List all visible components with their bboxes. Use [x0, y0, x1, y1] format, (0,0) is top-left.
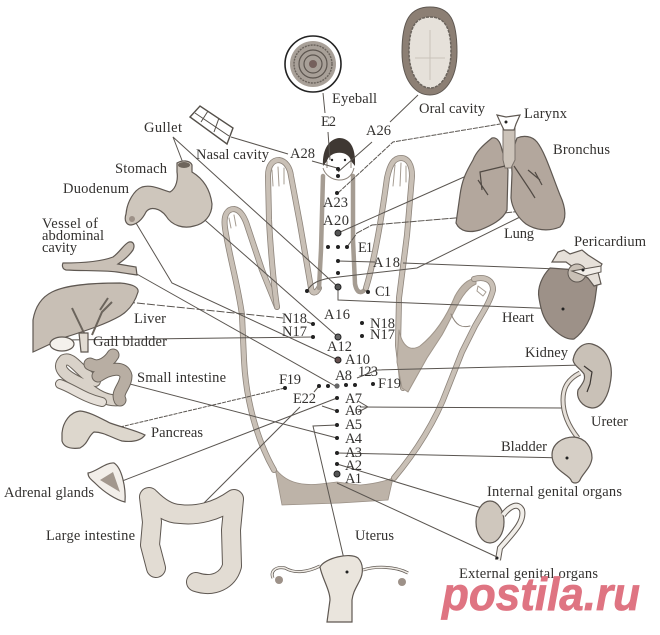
ureter	[563, 373, 580, 438]
thumb outer edge and right palm edge	[394, 278, 493, 478]
organ labels: Nasal cavity	[196, 147, 270, 163]
organ labels: Bronchus	[553, 142, 610, 158]
right lung	[511, 136, 565, 230]
organ labels: Larynx	[524, 106, 568, 122]
organ labels: Oral cavity	[419, 101, 486, 117]
organ labels: Pericardium	[574, 234, 647, 250]
organ labels: Eyeball	[332, 91, 377, 107]
organ labels: Pancreas	[151, 425, 203, 441]
icon: oral cavity	[402, 7, 457, 95]
organ labels: Duodenum	[63, 181, 130, 197]
point labels: A20	[323, 213, 349, 229]
hand outline	[225, 158, 493, 505]
organ labels: Liver	[134, 311, 166, 327]
icon: kidney and ureter	[563, 344, 611, 438]
point labels: N18	[370, 316, 395, 332]
organ labels: Stomach	[115, 161, 168, 177]
point labels: A5	[345, 417, 362, 433]
icon: pancreas	[62, 411, 145, 448]
organ labels: Ureter	[591, 414, 628, 430]
point labels: A12	[327, 339, 352, 355]
organ labels: Vessel of	[42, 216, 98, 232]
organ labels: Lung	[504, 226, 534, 242]
point labels: A16	[324, 307, 350, 323]
icon: uterus	[272, 556, 408, 622]
organ labels: Kidney	[525, 345, 569, 361]
point labels: E2	[321, 114, 336, 130]
organ labels: Uterus	[355, 528, 394, 544]
icon: internal and external genital organs	[476, 501, 522, 560]
bronchial branches	[478, 166, 542, 198]
acupoint dots	[283, 167, 375, 477]
watermark: postila.ru	[440, 568, 640, 620]
point labels: A1	[345, 471, 362, 487]
point labels: F19	[378, 376, 401, 392]
icon: large intestine	[149, 497, 234, 584]
finger nails	[229, 163, 486, 296]
point labels: A28	[290, 146, 315, 162]
point labels	[279, 114, 401, 487]
icon: larynx and bronchus lungs	[456, 115, 565, 232]
point labels: A26	[366, 123, 391, 139]
icon: small intestine	[60, 355, 126, 402]
point labels: F19	[279, 372, 301, 388]
face on middle finger	[323, 138, 355, 180]
point labels: N17	[370, 327, 395, 343]
trachea	[503, 128, 515, 168]
ring finger	[268, 160, 319, 307]
organ labels: Small intestine	[137, 370, 226, 386]
point labels: 123	[358, 364, 378, 380]
left palm edge and little finger	[225, 209, 277, 470]
icon: heart and pericardium	[539, 250, 602, 339]
organ labels: External genital organs	[459, 566, 598, 582]
organ labels: Internal genital organs	[487, 484, 622, 500]
point labels: A23	[323, 195, 348, 211]
hair	[323, 138, 355, 166]
point labels: N18	[282, 311, 307, 327]
organ labels: abdominal	[42, 228, 104, 244]
icon: eyeball	[285, 36, 341, 92]
organ labels	[4, 91, 647, 582]
point labels: A10	[345, 352, 370, 368]
hand base shading	[275, 468, 393, 505]
point labels: A3	[345, 445, 362, 461]
point labels: A7	[345, 391, 362, 407]
icon: abdominal vessel	[62, 242, 137, 275]
eyes and jaw	[323, 161, 354, 180]
index finger	[366, 158, 412, 388]
organ labels: Gullet	[144, 120, 182, 136]
point labels: A6	[345, 403, 362, 419]
point labels: A8	[335, 368, 352, 384]
point labels: E1	[358, 240, 373, 256]
icon: nasal cavity	[190, 106, 233, 144]
point labels: C1	[375, 284, 391, 300]
larynx	[497, 115, 520, 130]
point labels: A18	[373, 255, 400, 271]
organ labels: Heart	[502, 310, 534, 326]
icon: liver and gall bladder	[33, 283, 138, 352]
organ labels: Adrenal glands	[4, 485, 94, 501]
thumb web wedge	[397, 278, 476, 392]
icon: adrenal glands	[88, 463, 125, 502]
kidney	[573, 344, 611, 408]
organ labels: Gall bladder	[93, 334, 167, 350]
organ labels: Bladder	[501, 439, 547, 455]
icon: stomach	[125, 161, 212, 227]
point labels: A4	[345, 431, 363, 447]
middle finger sides	[319, 176, 323, 288]
point labels: N17	[282, 324, 307, 340]
leader lines	[62, 93, 583, 572]
organ labels: Large intestine	[46, 528, 135, 544]
icon: bladder	[552, 437, 592, 483]
point labels: E22	[293, 391, 316, 407]
left lung	[456, 138, 508, 232]
thumb knuckle line	[451, 314, 470, 327]
organ labels: cavity	[42, 240, 78, 256]
point labels: A2	[345, 458, 362, 474]
